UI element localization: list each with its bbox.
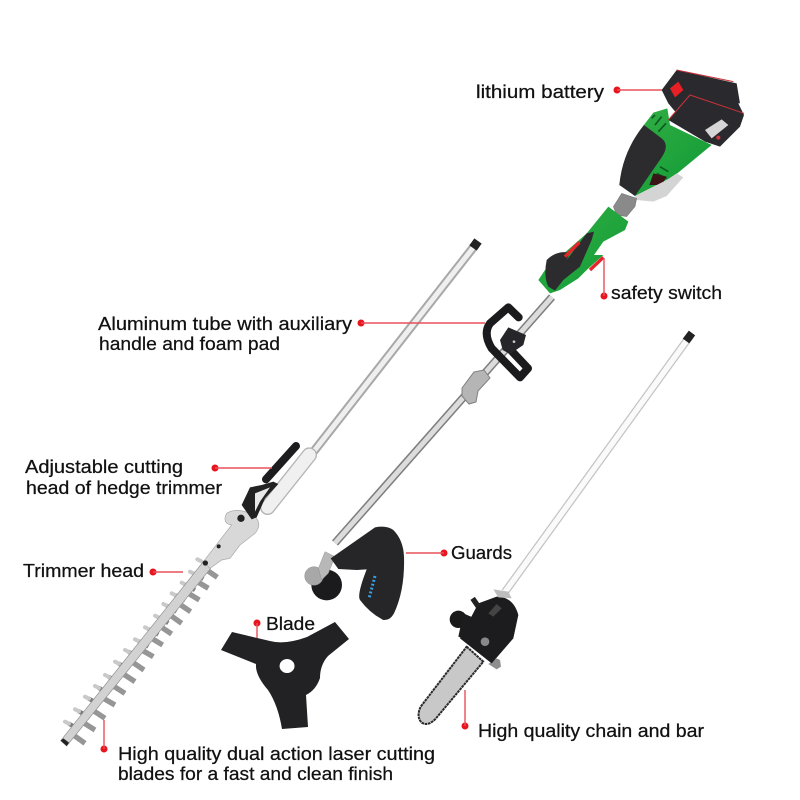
red safety switch xyxy=(565,242,603,270)
guard xyxy=(331,527,404,620)
power head and battery xyxy=(538,70,744,293)
callout: aluminum tube: handle and foam pad xyxy=(99,333,280,354)
callout: adjustable cutting head: Adjustable cutting xyxy=(25,456,183,477)
tube collar xyxy=(268,455,309,507)
adjusting clamp xyxy=(242,482,278,519)
callout: laser cutting blades: blades for a fast and clean finish xyxy=(118,763,393,784)
cutter bar xyxy=(61,562,211,746)
dark motor grip xyxy=(619,125,666,196)
adjusting handle xyxy=(266,446,296,479)
callout: safety switch: safety switch xyxy=(611,282,722,303)
spool xyxy=(311,570,342,600)
callout: laser cutting blades: High quality dual action laser cutting xyxy=(118,743,435,764)
cutting teeth, lower row xyxy=(73,570,217,743)
bolt xyxy=(481,637,489,646)
green control handle xyxy=(538,207,628,293)
black housing xyxy=(460,597,518,663)
callout: lithium battery xyxy=(476,81,662,102)
coupling xyxy=(613,193,637,217)
callout: chain and bar: High quality chain and bar xyxy=(478,720,704,741)
front battery xyxy=(668,90,744,147)
callout: lithium battery: lithium battery xyxy=(476,81,605,102)
callout: laser cutting blades xyxy=(100,720,435,784)
shaft coupling xyxy=(462,370,490,404)
callout: guards xyxy=(406,542,512,563)
oil cap xyxy=(473,598,478,607)
callout: adjustable cutting head xyxy=(25,456,272,498)
callout: aluminum tube xyxy=(98,313,485,354)
aluminum hedge trimmer tube xyxy=(300,241,478,469)
upper teeth tips xyxy=(65,559,201,724)
tensioner knob xyxy=(450,611,475,640)
chain and bar xyxy=(419,647,483,724)
motor housing green xyxy=(620,108,712,196)
callout: adjustable cutting head: head of hedge trimmer xyxy=(26,477,222,498)
callout: safety switch xyxy=(600,258,722,303)
callout: guards: Guards xyxy=(451,542,512,563)
housing slot xyxy=(488,604,502,617)
collar xyxy=(493,589,512,598)
callout: blade: Blade xyxy=(266,613,315,634)
gear coupling xyxy=(305,552,335,585)
chainsaw pole tube xyxy=(505,333,692,592)
chainsaw head xyxy=(419,589,518,724)
callout: chain and bar xyxy=(462,690,704,741)
three-point blade xyxy=(221,622,349,729)
silver gear housing xyxy=(635,173,683,202)
hedge trimmer xyxy=(61,446,309,746)
bar clamp xyxy=(488,658,501,669)
callout: trimmer head: Trimmer head xyxy=(23,560,144,581)
gear head xyxy=(203,510,259,568)
guard indicator dots xyxy=(369,576,375,597)
callout: aluminum tube: Aluminum tube with auxiliary xyxy=(98,313,353,334)
dark control grip xyxy=(545,232,594,291)
main aluminum shaft xyxy=(335,297,552,543)
auxiliary handle with foam pad xyxy=(487,307,528,377)
rear battery xyxy=(662,70,740,113)
callout: blade xyxy=(254,613,315,638)
cutting teeth, upper row xyxy=(68,573,203,729)
motor housing vents xyxy=(652,115,668,178)
grass trimmer head and guard xyxy=(305,527,404,620)
display window xyxy=(649,173,667,185)
